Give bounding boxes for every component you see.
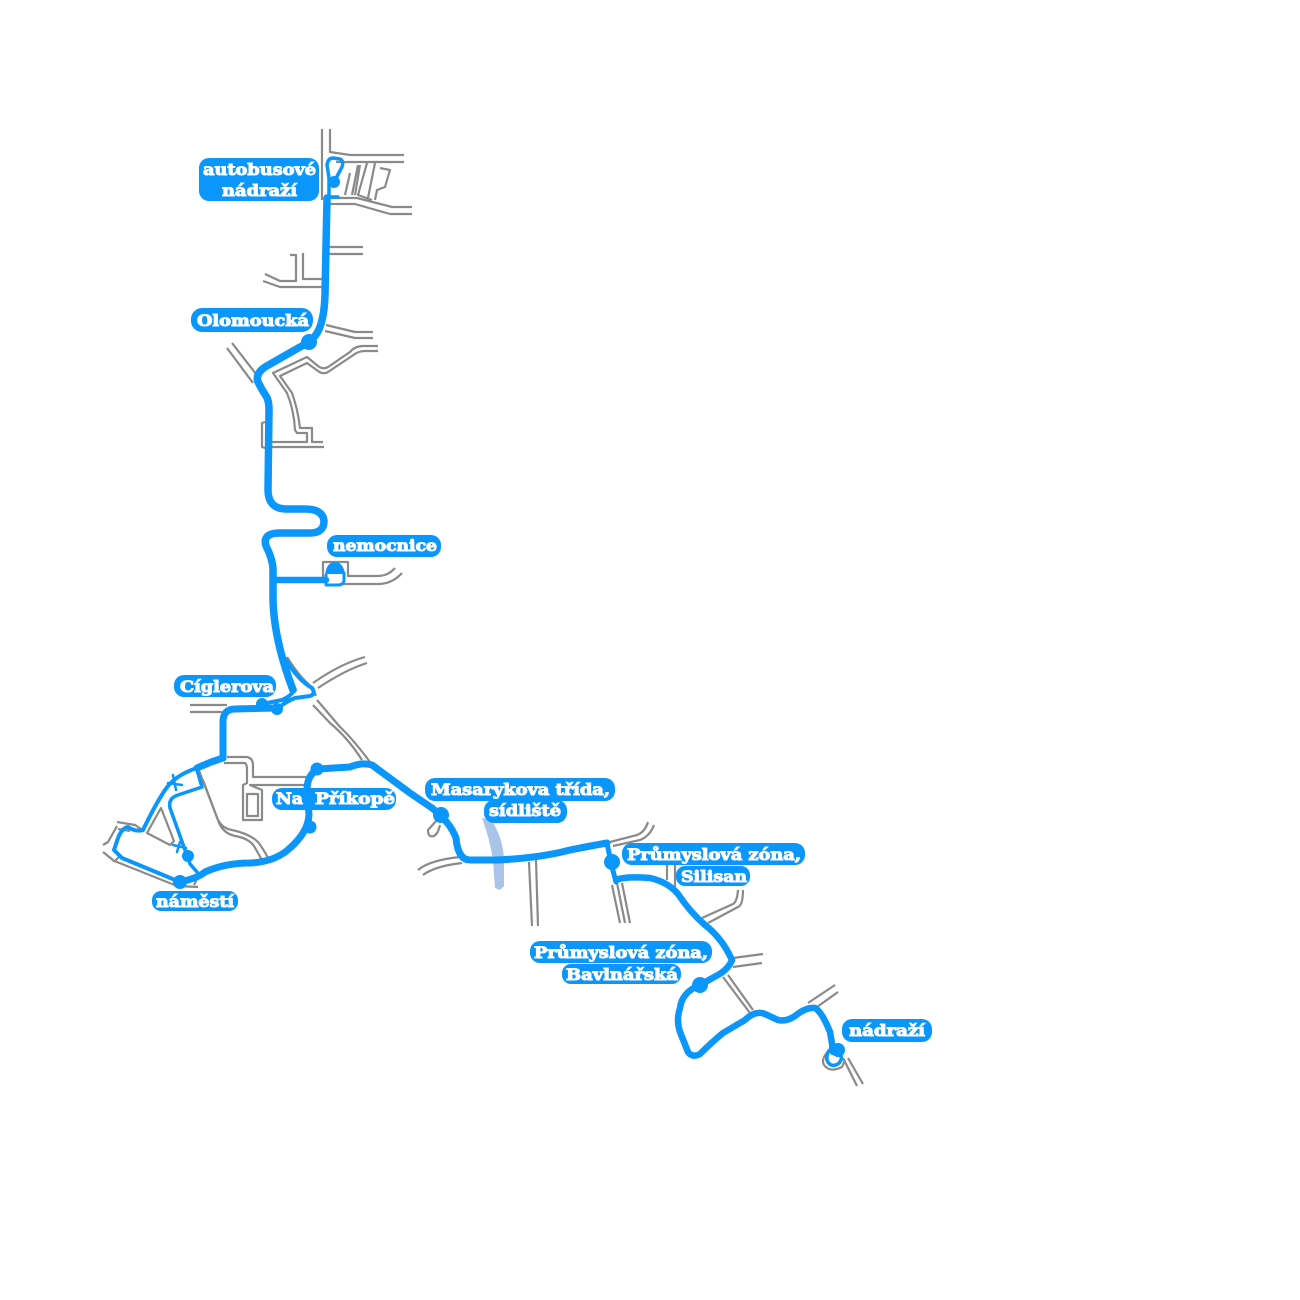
route: bus station loop bbox=[327, 158, 343, 197]
route: hospital loop bbox=[325, 562, 345, 585]
label: nemocnice: nemocnice bbox=[333, 536, 437, 555]
label: Průmyslová zóna, Bavlnářská bbox=[530, 941, 712, 984]
label: autobusové nádraží: autobusové bbox=[203, 160, 316, 179]
stop: Cíglerova 2 bbox=[271, 703, 283, 715]
river bbox=[482, 818, 504, 890]
stop: Masarykova třída bbox=[433, 807, 449, 823]
stop: Silisan bbox=[604, 854, 620, 870]
label: Olomoucká: Olomoucká bbox=[197, 311, 309, 330]
route: main thick line north bbox=[257, 198, 327, 690]
stop: Olomoucká bbox=[301, 334, 317, 350]
road network bbox=[103, 129, 863, 1086]
label: nádraží: nádraží bbox=[849, 1021, 925, 1040]
label: Masarykova třída, sídliště: sídliště bbox=[489, 801, 561, 820]
route: terminal loop bbox=[827, 1048, 841, 1065]
route: main thick line centre bbox=[197, 708, 277, 768]
route: old town loop bbox=[114, 768, 197, 882]
stop: Bavlnářská bbox=[692, 977, 708, 993]
label: autobusové nádraží bbox=[199, 158, 319, 201]
stop: Na Příkopě south bbox=[304, 820, 316, 834]
label: Na Příkopě: Příkopě bbox=[315, 789, 395, 808]
label: Průmyslová zóna, Silisan: Silisan bbox=[681, 867, 747, 886]
label: Cíglerova: Cíglerova bbox=[180, 677, 274, 696]
route: south thick line bbox=[180, 764, 607, 882]
stop: Na Příkopě north bbox=[310, 762, 324, 776]
label: Na Příkopě: Na bbox=[276, 789, 303, 808]
label: Olomoucká bbox=[191, 308, 313, 332]
stops bbox=[173, 176, 845, 1057]
stop: autobusové nádraží bbox=[328, 176, 340, 188]
route direction arrows bbox=[168, 775, 186, 852]
label: Masarykova třída, sídliště: Masarykova třída, bbox=[431, 780, 610, 799]
label: Průmyslová zóna, Bavlnářská: Průmyslová zóna, bbox=[534, 942, 708, 962]
stop: náměstí bbox=[173, 875, 187, 889]
route: roundabout bbox=[262, 660, 314, 709]
label: Průmyslová zóna, Silisan: Průmyslová zóna, bbox=[627, 844, 801, 864]
label: Masarykova třída, sídliště bbox=[425, 778, 615, 823]
route: to the railway station bbox=[616, 877, 833, 1056]
label: Průmyslová zóna, Bavlnářská: Bavlnářská bbox=[566, 965, 678, 984]
label: náměstí: náměstí bbox=[156, 892, 234, 911]
label: nádraží bbox=[842, 1019, 932, 1042]
stop: náměstí 2 bbox=[182, 850, 194, 862]
bus route bbox=[114, 158, 845, 1065]
route: inner old town branch bbox=[170, 770, 202, 872]
label: Na Příkopě bbox=[272, 788, 396, 810]
route: industrial zone branch bbox=[607, 843, 616, 882]
route: hospital spur bbox=[273, 577, 326, 583]
stop: Cíglerova bbox=[256, 698, 268, 710]
label: autobusové nádraží: nádraží bbox=[222, 181, 297, 200]
stop: nádraží bbox=[831, 1043, 845, 1057]
label: Průmyslová zóna, Silisan bbox=[622, 843, 805, 886]
